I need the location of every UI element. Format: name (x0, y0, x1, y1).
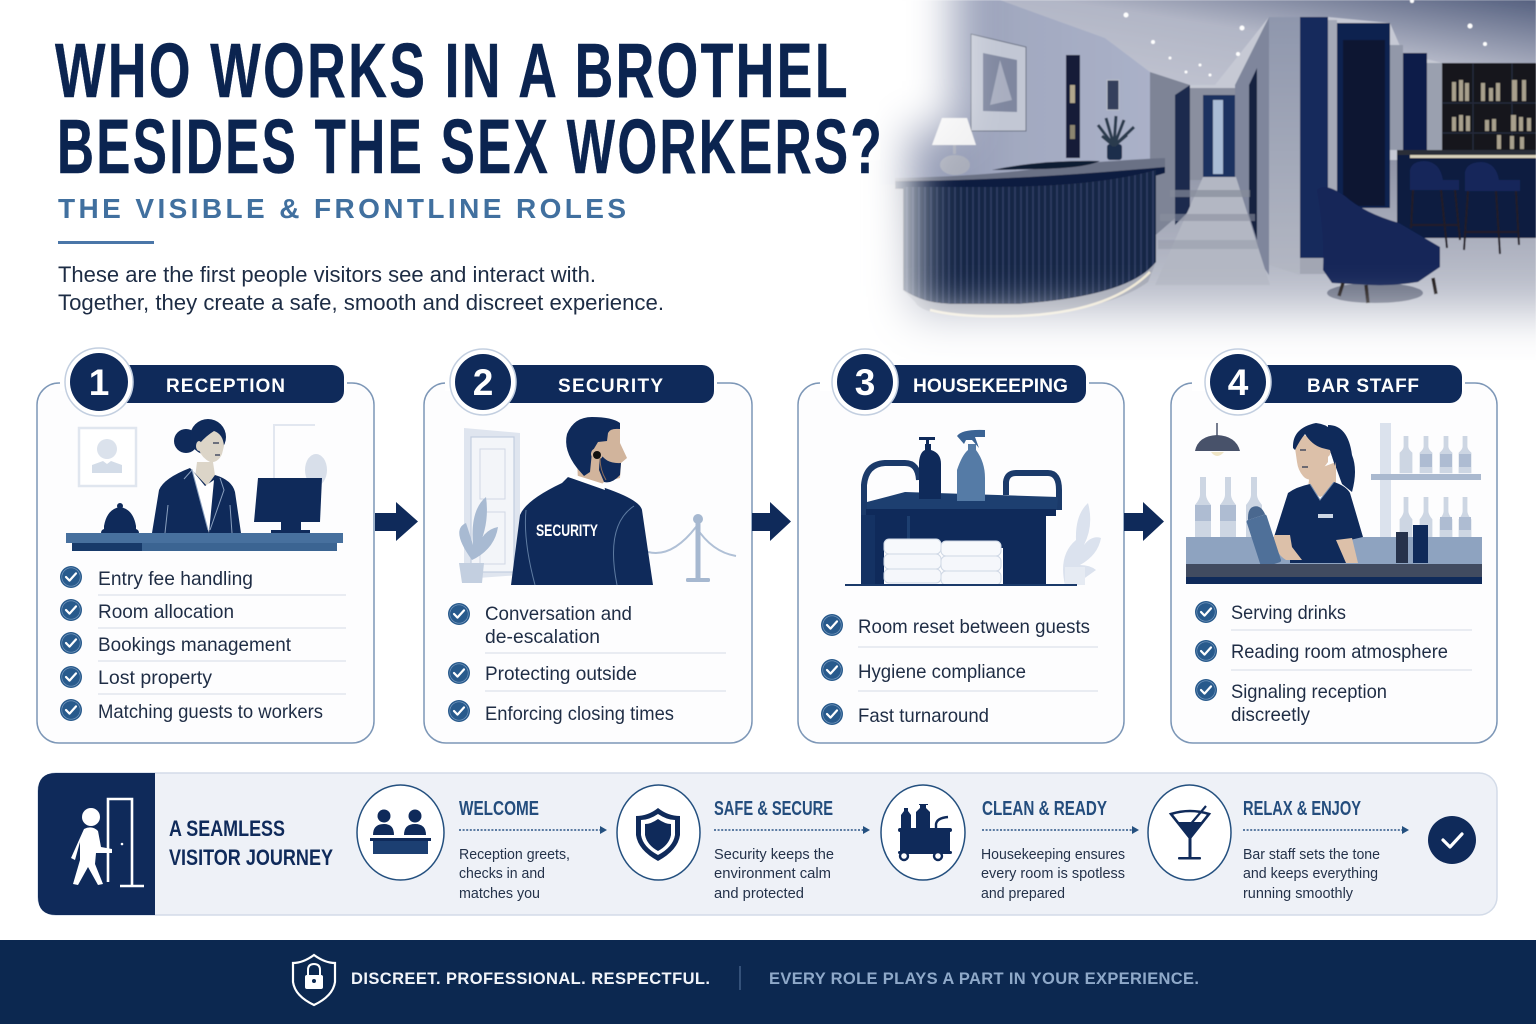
security duties list: Enforcing closing times (485, 703, 674, 725)
bar staff duties list: Signaling reception (1231, 681, 1387, 703)
step: safe and secure: SAFE & SECURE (714, 798, 833, 820)
icon: journey complete check (1428, 816, 1476, 864)
illustration: receptionist at desk (66, 419, 343, 551)
housekeeping duties list: Fast turnaround (858, 705, 989, 727)
bar counter (1397, 150, 1536, 238)
title (55, 28, 884, 190)
step: welcome (357, 785, 607, 902)
housekeeping header: 3 (855, 362, 875, 403)
illustration: cleaning cart (845, 430, 1101, 586)
housekeeping duties list: Room reset between guests (858, 616, 1090, 638)
reception header (65, 348, 344, 416)
ceiling lights (1124, 0, 1487, 76)
illustration: security guard: SECURITY (536, 521, 598, 540)
arrow: reception to security (375, 502, 418, 541)
footer slogan: DISCREET. PROFESSIONAL. RESPECTFUL. (351, 970, 710, 988)
step: relax and enjoy: and keeps everything (1243, 865, 1378, 882)
reception duties list: Entry fee handling (98, 568, 253, 590)
intro text: These are the first people visitors see and interact with. (58, 262, 596, 287)
reception duties list: Room allocation (98, 601, 234, 623)
icon: person at door (71, 799, 144, 886)
security header: SECURITY (558, 376, 663, 397)
reception duties list: Matching guests to workers (98, 701, 323, 723)
step: safe and secure: environment calm (714, 865, 831, 882)
footer tagline: EVERY ROLE PLAYS A PART IN YOUR EXPERIENCE. (769, 970, 1199, 988)
security duties list: de-escalation (485, 626, 600, 648)
illustration: bartender (1186, 423, 1482, 584)
footer band (0, 940, 1536, 1024)
reception duties list: Bookings management (98, 634, 292, 656)
step: safe and secure: Security keeps the (714, 846, 834, 863)
step: welcome: matches you (459, 885, 540, 902)
panel: reception (37, 348, 374, 743)
step: relax and enjoy (1148, 785, 1409, 902)
bar staff duties list: Serving drinks (1231, 602, 1346, 624)
step: relax and enjoy: Bar staff sets the tone (1243, 846, 1380, 863)
step: welcome: Reception greets, (459, 846, 570, 863)
journey heading: VISITOR JOURNEY (169, 845, 333, 870)
security header (450, 349, 714, 415)
reception header: RECEPTION (166, 376, 285, 397)
panel: housekeeping (798, 349, 1124, 743)
journey heading: A SEAMLESS (169, 816, 285, 841)
step: clean and ready: and prepared (981, 885, 1065, 902)
housekeeping header (832, 349, 1086, 415)
step: clean and ready: every room is spotless (981, 865, 1125, 882)
reception counter (895, 158, 1165, 316)
step: clean and ready: Housekeeping ensures (981, 846, 1125, 863)
doors (1337, 23, 1442, 208)
title: WHO WORKS IN A BROTHEL (55, 28, 850, 114)
security header: 2 (473, 362, 493, 403)
title: BESIDES THE SEX WORKERS? (57, 104, 884, 190)
housekeeping duties list (821, 614, 1098, 727)
painting and niches (971, 34, 1026, 131)
bar staff duties list (1195, 601, 1472, 726)
reception duties list: Lost property (98, 667, 212, 689)
icon: shield with padlock (293, 955, 335, 1005)
bar staff header (1205, 349, 1462, 415)
column (1269, 17, 1337, 275)
armchair (1317, 187, 1440, 303)
accent rule (58, 241, 154, 244)
security duties list: Conversation and (485, 603, 632, 625)
reception duties list (60, 566, 346, 723)
security duties list: Protecting outside (485, 663, 637, 685)
arrow: security to housekeeping (752, 502, 791, 541)
bar stools (1410, 161, 1520, 254)
journey heading (169, 816, 333, 870)
bar staff duties list: discreetly (1231, 704, 1310, 726)
subtitle: THE VISIBLE & FRONTLINE ROLES (58, 193, 626, 224)
panel: security (424, 349, 752, 743)
step: relax and enjoy: running smoothly (1243, 885, 1353, 902)
bar staff header: BAR STAFF (1307, 376, 1419, 397)
panel: bar staff (1171, 349, 1497, 743)
step: welcome: checks in and (459, 865, 545, 882)
step: safe and secure (617, 785, 870, 902)
step: welcome: WELCOME (459, 798, 539, 820)
bar staff duties list: Reading room atmosphere (1231, 641, 1448, 663)
intro text: Together, they create a safe, smooth and discreet experience. (58, 290, 664, 315)
reception header: 1 (89, 362, 109, 403)
panel: visitor journey band (38, 773, 1497, 915)
arrow: housekeeping to bar staff (1124, 502, 1164, 541)
housekeeping duties list: Hygiene compliance (858, 661, 1026, 683)
bar staff header: 4 (1228, 362, 1249, 403)
step: relax and enjoy: RELAX & ENJOY (1243, 798, 1361, 820)
step: clean and ready (881, 785, 1139, 902)
step: safe and secure: and protected (714, 885, 804, 902)
hero photo: reception lobby (860, 0, 1536, 360)
flowers (1098, 116, 1134, 160)
bar shelves and bottles (1442, 63, 1536, 151)
security duties list (448, 603, 726, 725)
step: clean and ready: CLEAN & READY (982, 798, 1108, 820)
intro text (58, 262, 664, 315)
housekeeping header: HOUSEKEEPING (913, 376, 1068, 397)
lamp (932, 118, 976, 175)
illustration: security guard (459, 417, 736, 585)
